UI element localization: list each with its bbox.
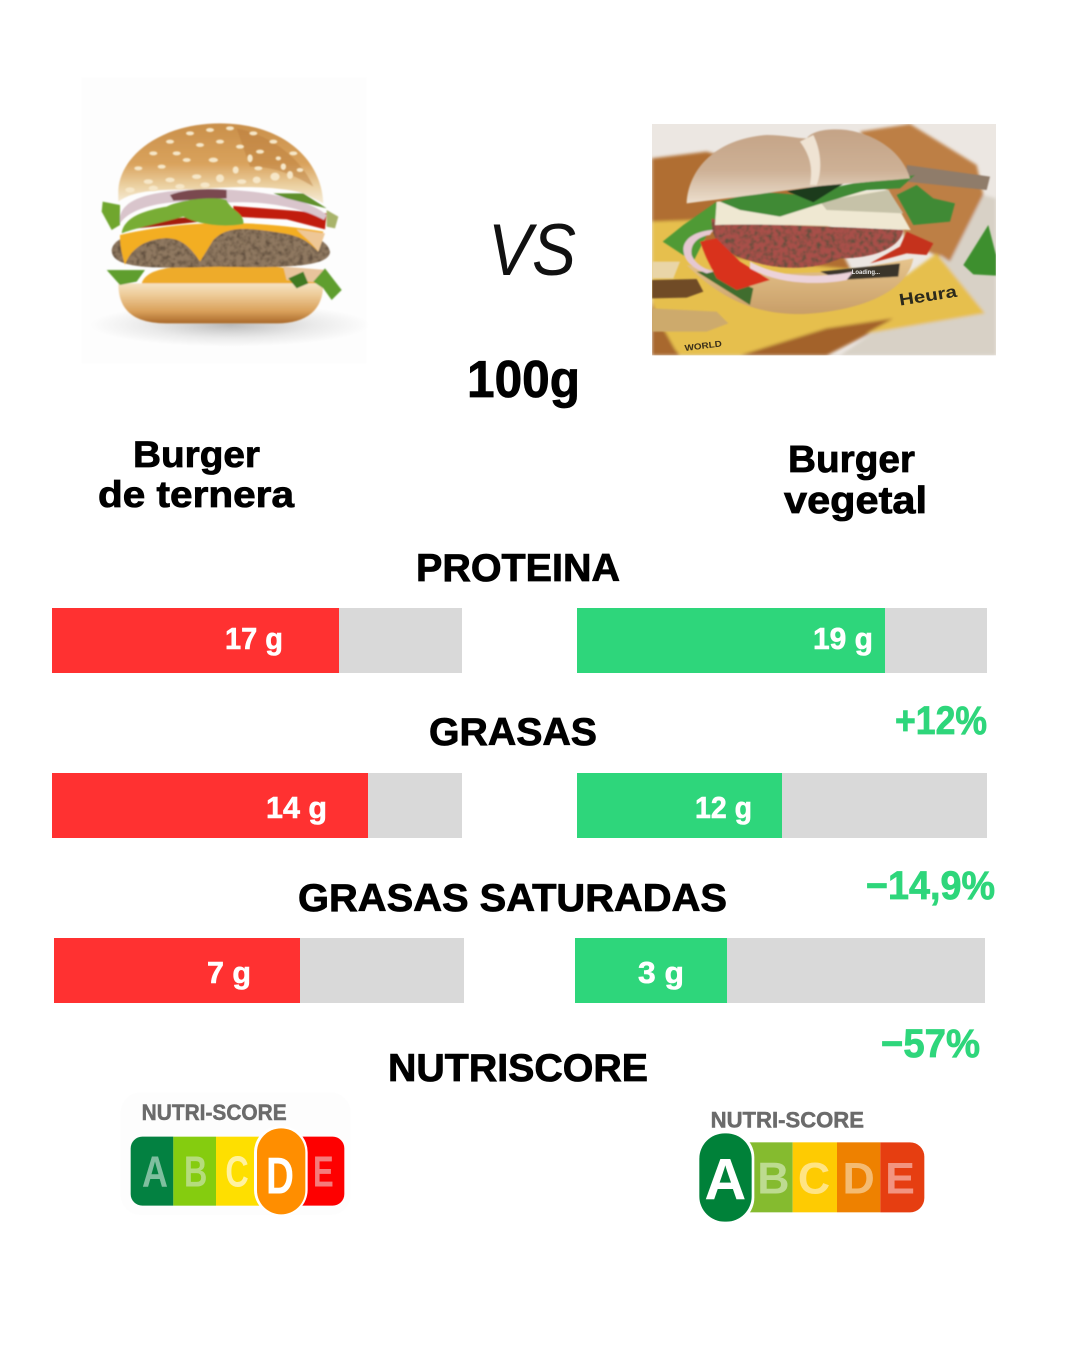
callout: +12%: +12% [895, 699, 987, 743]
label: Burger vegetal: Burger [788, 439, 915, 481]
badge: Nutri-Score A: C [798, 1154, 830, 1203]
bar: vegetal protein [577, 608, 987, 673]
badge: Nutri-Score A: E [885, 1154, 915, 1203]
label: Burger de ternera: Burger [133, 434, 260, 475]
heading: GRASAS SATURADAS: GRASAS SATURADAS [298, 877, 727, 920]
text: 100g: 100g [467, 351, 580, 409]
badge: Nutri-Score A: D [843, 1154, 875, 1203]
badge: Nutri-Score D: E [313, 1148, 334, 1197]
bar: vegetal fat: 12 g [695, 790, 752, 825]
label: Burger vegetal [784, 439, 927, 522]
heading: GRASAS: GRASAS [429, 711, 597, 754]
badge: Nutri-Score D [121, 1092, 351, 1216]
badge: Nutri-Score D: D [266, 1146, 294, 1204]
bar: beef protein [52, 608, 462, 673]
badge: Nutri-Score A: NUTRI-SCORE [711, 1107, 864, 1132]
label: Burger de ternera [98, 434, 294, 515]
callout: -57%: −57% [881, 1022, 980, 1066]
bar: vegetal protein: 19 g [813, 621, 873, 656]
bar: beef fat: 14 g [266, 790, 327, 825]
bar: beef saturated fat: 7 g [207, 955, 251, 990]
badge: Nutri-Score D: NUTRI-SCORE [142, 1100, 287, 1125]
image: vegetal burger [652, 124, 996, 355]
image: vegetal burger: Loading... [852, 270, 880, 276]
badge: Nutri-Score A: B [757, 1154, 789, 1203]
badge: Nutri-Score D: C [225, 1148, 249, 1197]
bar: beef protein: 17 g [225, 621, 283, 656]
bar: beef fat [52, 773, 462, 838]
label: Burger de ternera: de ternera [98, 474, 294, 515]
heading: PROTEINA: PROTEINA [416, 547, 620, 590]
badge: Nutri-Score D: A [142, 1148, 168, 1197]
bar: beef saturated fat [54, 938, 464, 1003]
image: beef burger [82, 77, 370, 363]
bar: vegetal saturated fat: 3 g [638, 955, 684, 990]
image: vegetal burger: WORLD [684, 339, 722, 353]
text: VS: VS [488, 210, 576, 291]
label: Burger vegetal: vegetal [784, 480, 927, 522]
badge: Nutri-Score D: B [184, 1148, 207, 1197]
callout: -14,9%: −14,9% [866, 864, 995, 908]
badge: Nutri-Score A [697, 1107, 924, 1224]
heading: NUTRISCORE: NUTRISCORE [388, 1047, 648, 1090]
bar: vegetal fat [577, 773, 987, 838]
bar: vegetal saturated fat [575, 938, 985, 1003]
badge: Nutri-Score A: A [704, 1148, 746, 1212]
image: vegetal burger: Heura [898, 282, 959, 310]
